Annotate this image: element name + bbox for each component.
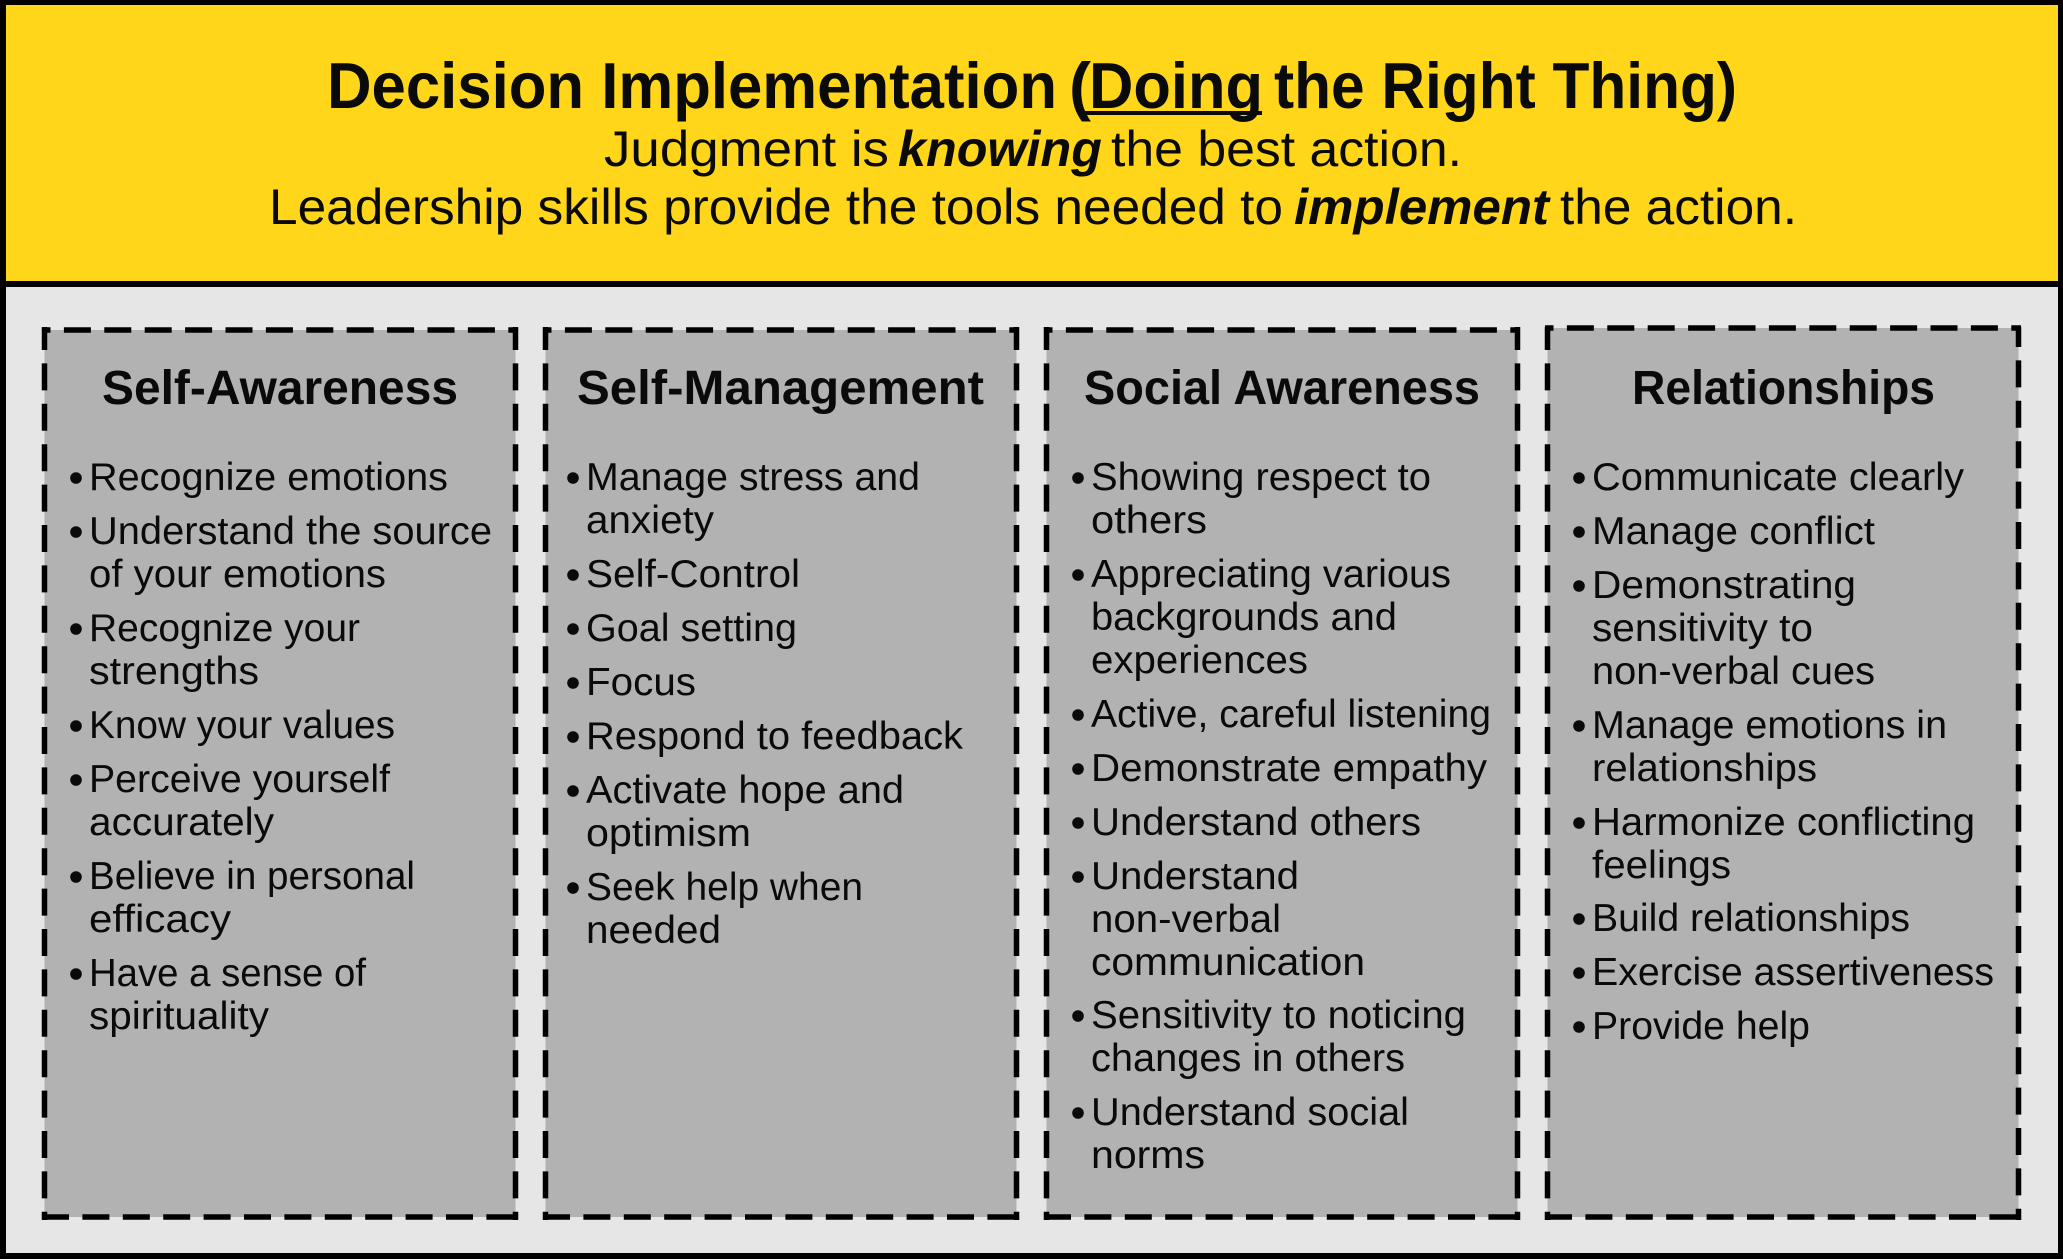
item: of your emotions — [89, 553, 386, 596]
list: Self-Management items — [567, 456, 963, 952]
subtitle line 1: knowing — [898, 121, 1102, 177]
item: efficacy — [89, 898, 232, 941]
panel: header banner — [6, 5, 2058, 287]
item — [567, 769, 904, 855]
item: backgrounds and — [1091, 596, 1397, 639]
item: Manage emotions in — [1592, 704, 1947, 747]
subtitle line 2: Leadership skills provide the tools needed to — [269, 179, 1283, 235]
item — [1573, 801, 1975, 887]
item: Provide help — [1592, 1005, 1810, 1048]
item: Manage stress and — [586, 456, 920, 499]
panel: Self-Management — [543, 327, 1019, 1220]
subtitle line 1: Judgment is — [604, 121, 889, 177]
item — [1072, 1091, 1409, 1177]
item — [1072, 855, 1365, 984]
item: communication — [1091, 941, 1365, 984]
item: relationships — [1592, 747, 1817, 790]
list: Social Awareness items — [1072, 456, 1491, 1177]
subtitle line 1: the best action. — [1111, 121, 1462, 177]
item: Know your values — [89, 704, 395, 747]
panel: Social Awareness — [1044, 327, 1520, 1220]
item — [70, 607, 360, 693]
subtitle line 1 — [604, 121, 1462, 177]
item — [1573, 564, 1875, 693]
item — [1573, 704, 1947, 790]
title: Doing — [1089, 49, 1263, 122]
item: Recognize emotions — [89, 456, 448, 499]
item: Respond to feedback — [586, 715, 963, 758]
item: Understand — [1091, 855, 1299, 898]
panel: Relationships — [1545, 327, 2022, 1220]
title: ( — [1069, 49, 1091, 122]
item: Seek help when — [586, 866, 863, 909]
item — [567, 456, 920, 542]
item: Exercise assertiveness — [1592, 951, 1994, 994]
item: Manage conflict — [1592, 510, 1875, 553]
subtitle line 2: implement — [1294, 179, 1551, 235]
title: Decision Implementation — [327, 49, 1057, 122]
subtitle line 2: the action. — [1560, 179, 1797, 235]
item — [1072, 553, 1451, 682]
item: non-verbal cues — [1592, 650, 1875, 693]
item — [70, 510, 492, 596]
item: Recognize your — [89, 607, 360, 650]
list: Relationships items — [1573, 456, 1994, 1048]
item — [70, 855, 415, 941]
title: the Right Thing) — [1274, 49, 1737, 122]
item: accurately — [89, 801, 275, 844]
item: Build relationships — [1592, 897, 1910, 940]
item: Active, careful listening — [1091, 693, 1491, 736]
panel: Self-Awareness — [42, 327, 518, 1220]
item: Understand social — [1091, 1091, 1409, 1134]
item — [1072, 456, 1431, 542]
item: Communicate clearly — [1592, 456, 1965, 499]
item: Showing respect to — [1091, 456, 1431, 499]
item — [70, 758, 390, 844]
item: Have a sense of — [89, 952, 366, 995]
item: norms — [1091, 1134, 1205, 1177]
item — [1072, 994, 1466, 1080]
item: Demonstrate empathy — [1091, 747, 1488, 790]
item: Focus — [586, 661, 696, 704]
heading: Self-Awareness: Self-Awareness — [102, 362, 458, 415]
item: sensitivity to — [1592, 607, 1813, 650]
item: feelings — [1592, 844, 1731, 887]
title — [327, 49, 1737, 122]
subtitle line 2 — [269, 179, 1797, 235]
item: changes in others — [1091, 1037, 1405, 1080]
heading: Relationships: Relationships — [1632, 362, 1935, 415]
item: Goal setting — [586, 607, 797, 650]
heading: Social Awareness: Social Awareness — [1084, 362, 1480, 415]
item: Understand the source — [89, 510, 492, 553]
item: strengths — [89, 650, 259, 693]
item: Sensitivity to noticing — [1091, 994, 1466, 1037]
item: Activate hope and — [586, 769, 904, 812]
item: Harmonize conflicting — [1592, 801, 1975, 844]
heading: Self-Management: Self-Management — [577, 362, 984, 415]
item: needed — [586, 909, 721, 952]
item — [70, 952, 366, 1038]
item: others — [1091, 499, 1207, 542]
item: Appreciating various — [1091, 553, 1451, 596]
item: Demonstrating — [1592, 564, 1856, 607]
item: Self-Control — [586, 553, 800, 596]
item: experiences — [1091, 639, 1308, 682]
item — [567, 866, 863, 952]
item: anxiety — [586, 499, 715, 542]
item: Understand others — [1091, 801, 1421, 844]
item: spirituality — [89, 995, 270, 1038]
list: Self-Awareness items — [70, 456, 492, 1038]
item: Perceive yourself — [89, 758, 390, 801]
item: non-verbal — [1091, 898, 1281, 941]
item: optimism — [586, 812, 751, 855]
item: Believe in personal — [89, 855, 415, 898]
